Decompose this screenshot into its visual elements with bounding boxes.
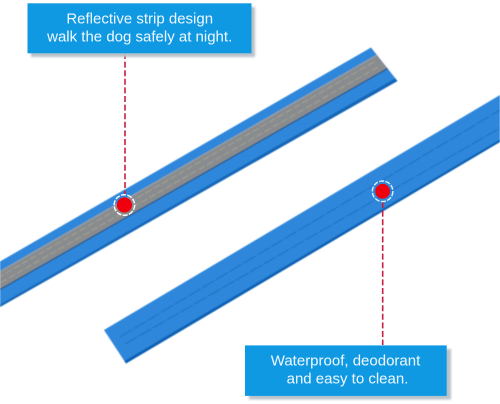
marker: reflective strip <box>114 195 135 215</box>
strip with reflective band <box>0 48 398 307</box>
bottom connector line <box>382 202 384 345</box>
band stitching <box>0 62 378 283</box>
strip body <box>104 95 500 364</box>
callout text: Waterproof, deodorant <box>271 352 421 370</box>
band shadow edge <box>0 68 388 290</box>
callout text: Reflective strip design <box>66 10 213 28</box>
callout: waterproof <box>245 345 451 400</box>
band highlight edge <box>0 55 377 272</box>
strip lower dark edge <box>0 78 398 307</box>
callout: reflective strip: walk the dog safely at night. <box>46 28 232 46</box>
strip body <box>0 48 398 307</box>
callout: waterproof: and easy to clean. <box>287 370 408 388</box>
stitching <box>120 110 500 344</box>
reflective band <box>0 55 387 289</box>
strip lower dark edge <box>124 140 500 364</box>
callout: reflective strip <box>28 3 255 57</box>
top connector line <box>124 53 126 195</box>
marker: waterproof strip <box>372 181 393 202</box>
plain strip <box>104 95 500 364</box>
